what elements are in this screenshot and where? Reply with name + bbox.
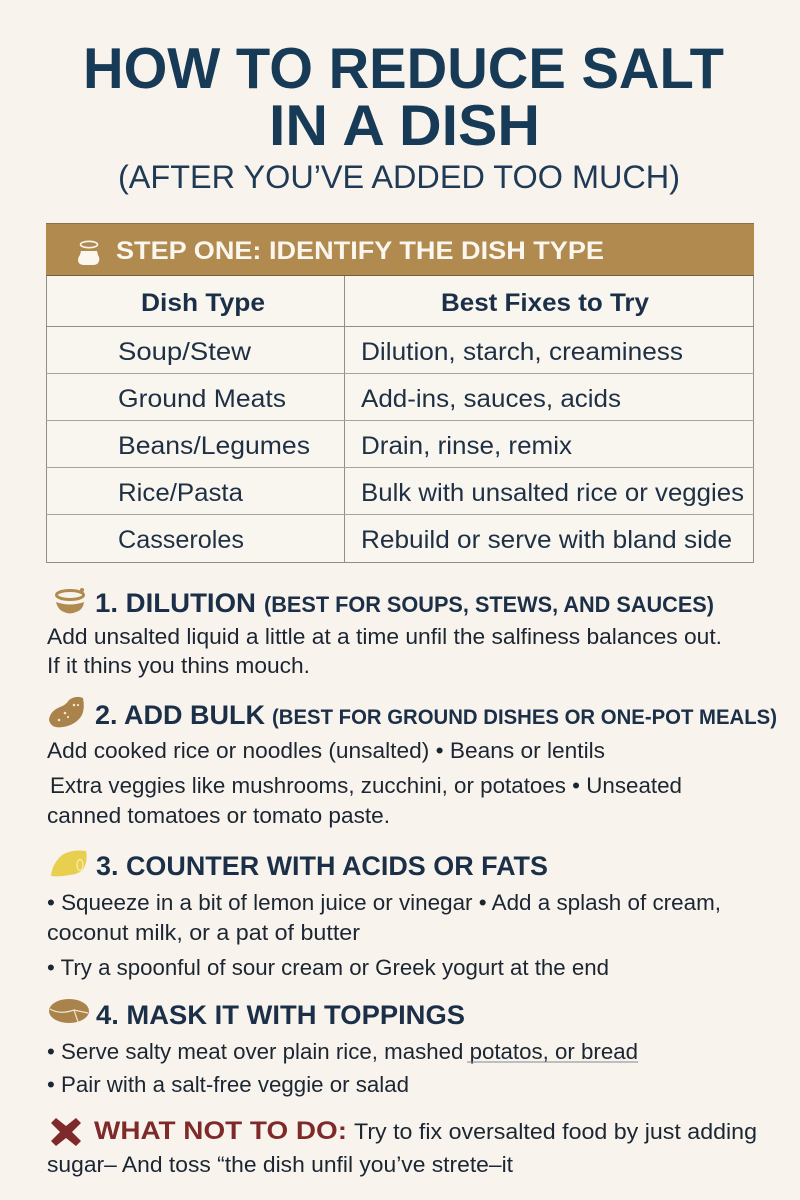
table row: ground meats: Add-ins, sauces, acids	[361, 385, 621, 413]
text: toppings body: • Serve salty meat over plain rice, mashed potatos, or bread	[47, 1039, 638, 1064]
text: warning body: sugar– And toss “the dish unfil you’ve strete–it	[47, 1152, 513, 1177]
table column headings: Dish Type	[141, 289, 265, 317]
table header band	[46, 223, 754, 276]
text: toppings body: • Pair with a salt-free veggie or salad	[47, 1072, 409, 1097]
table row: beans: Beans/Legumes	[118, 432, 310, 460]
heading: add bulk: (BEST FOR GROUND DISHES OR ONE-POT MEALS)	[272, 706, 777, 729]
table row: ground meats: Ground Meats	[118, 385, 286, 413]
table row: soup	[118, 338, 683, 366]
heading: add bulk: 2. ADD BULK	[95, 700, 265, 730]
heading: dilution	[95, 588, 714, 618]
heading: counter: 3. COUNTER WITH ACIDS OR FATS	[96, 851, 548, 881]
table row: casseroles: Casseroles	[118, 526, 244, 554]
table row: rice	[118, 479, 744, 507]
text: add bulk body: Add cooked rice or noodles (unsalted) • Beans or lentils	[47, 738, 605, 763]
text: dilution body	[47, 624, 722, 678]
heading: what not to do: WHAT NOT TO DO:	[94, 1117, 347, 1145]
text: add bulk body: canned tomatoes or tomato paste.	[47, 803, 390, 828]
text: counter body: coconut milk, or a pat of butter	[47, 920, 360, 945]
text: warning body	[47, 1119, 757, 1177]
table column headings	[141, 289, 649, 317]
callout: what not to do	[47, 1117, 757, 1177]
table row: casseroles: Rebuild or serve with bland side	[361, 526, 732, 554]
table row: soup: Soup/Stew	[118, 338, 252, 366]
panel: step one table	[46, 223, 754, 562]
text: add bulk body: Extra veggies like mushrooms, zucchini, or potatoes • Unseated	[50, 773, 682, 798]
table row: ground meats	[118, 385, 621, 413]
text: dilution body: If it thins you thins mouch.	[47, 653, 310, 678]
text: counter body: • Squeeze in a bit of lemon juice or vinegar • Add a splash of cream,	[47, 890, 721, 915]
table row: rice: Rice/Pasta	[118, 479, 243, 507]
table column headings: Best Fixes to Try	[441, 289, 649, 317]
table header band: STEP ONE: IDENTIFY THE DISH TYPE	[116, 237, 604, 265]
title: IN A DISH	[269, 94, 540, 158]
icon: cheese wheel	[49, 999, 89, 1023]
table row: soup: Dilution, starch, creaminess	[361, 338, 683, 366]
icon: red x	[51, 1118, 81, 1146]
heading: dilution: 1. DILUTION	[95, 588, 256, 618]
heading: toppings: 4. MASK IT WITH TOPPINGS	[96, 1000, 465, 1030]
title: HOW TO REDUCE SALT	[83, 37, 724, 101]
text: add bulk body	[47, 738, 682, 828]
text: toppings body	[47, 1039, 638, 1097]
text: warning body: Try to fix oversalted food by just adding	[354, 1119, 757, 1144]
text: counter body: • Try a spoonful of sour cream or Greek yogurt at the end	[47, 955, 609, 980]
panel: mask it with toppings	[47, 999, 638, 1097]
text: dilution body: Add unsalted liquid a little at a time unfil the salfiness balances out.	[47, 624, 722, 649]
icon: bowl	[56, 588, 84, 614]
heading: add bulk	[95, 700, 777, 730]
panel: counter with acids or fats	[47, 850, 721, 980]
table row: casseroles	[118, 526, 732, 554]
icon: lemon	[51, 850, 87, 876]
table row: beans	[118, 432, 573, 460]
title	[83, 37, 724, 158]
table row: rice: Bulk with unsalted rice or veggies	[361, 479, 744, 507]
heading: dilution: (BEST FOR SOUPS, STEWS, AND SAUCES)	[264, 592, 714, 617]
icon: salt jar	[78, 241, 99, 265]
panel: dilution	[47, 588, 722, 678]
text: counter body	[47, 890, 721, 980]
panel: add bulk	[47, 697, 777, 828]
subtitle: (AFTER YOU’VE ADDED TOO MUCH)	[118, 159, 680, 195]
icon: potato	[49, 697, 84, 727]
table row: beans: Drain, rinse, remix	[361, 432, 573, 460]
